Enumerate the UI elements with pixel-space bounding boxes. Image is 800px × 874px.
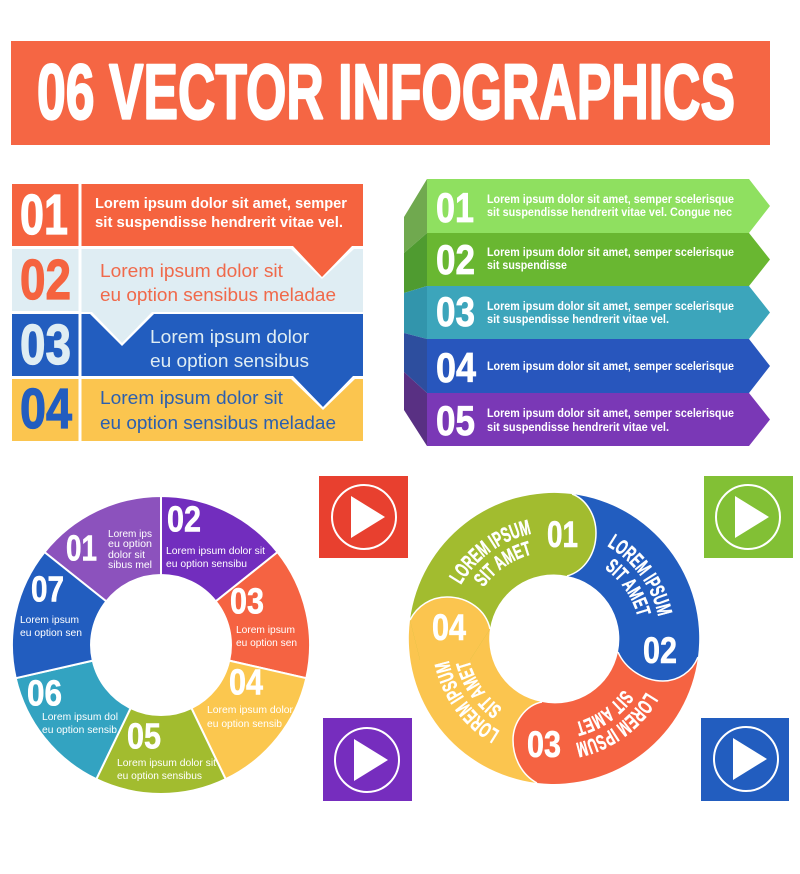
row 3	[404, 286, 770, 339]
row 5: Lorem ipsum dolor sit amet, semper scelerisque	[487, 408, 734, 420]
row 2: 02	[20, 248, 71, 312]
segment 06: 06	[27, 672, 62, 714]
icon: purple play button	[323, 718, 412, 801]
row 4: eu option sensibus meladae	[100, 413, 336, 433]
segment 01 label: LOREM IPSUM	[448, 520, 531, 584]
row 3: sit suspendisse hendrerit vitae vel.	[487, 314, 669, 326]
segment 04 label: 04	[432, 607, 466, 648]
segment 03: 03	[230, 580, 264, 622]
row 2	[12, 248, 363, 343]
row 4: 04	[436, 344, 477, 391]
segment 01: eu option	[108, 538, 152, 550]
segment 03	[216, 552, 310, 678]
segment 05: eu option sensibus	[117, 770, 202, 782]
segment 02: eu option sensibu	[166, 558, 247, 570]
row 5: sit suspendisse hendrerit vitae vel.	[487, 422, 669, 434]
segment 04: 04	[229, 662, 263, 702]
row 3: Lorem ipsum dolor sit amet, semper scelerisque	[487, 301, 734, 313]
segment 01 label: SIT AMET	[474, 540, 530, 586]
segment 01 label: 01	[547, 514, 578, 555]
segment 02 label: SIT AMET	[606, 559, 652, 614]
row 5	[404, 372, 770, 446]
row 3: 03	[20, 313, 71, 377]
segment 01: Lorem ips	[108, 528, 152, 540]
row 1	[12, 183, 363, 277]
row 3: 03	[436, 288, 475, 335]
row 1: 01	[436, 184, 474, 231]
segment 04	[191, 661, 306, 779]
row 4: 04	[20, 377, 72, 441]
icon: red play button	[319, 476, 408, 558]
segment 05: 05	[127, 716, 161, 756]
segment 01: dolor sit	[108, 549, 145, 561]
segment 01: 01	[66, 528, 97, 568]
segment 07	[12, 552, 106, 678]
segment 05	[96, 708, 226, 794]
row 2: Lorem ipsum dolor sit	[100, 261, 283, 281]
segment 04 label: LOREM IPSUM	[434, 661, 500, 744]
row 2: sit suspendisse	[487, 260, 567, 272]
row 5: 05	[436, 397, 475, 444]
icon: green play button	[704, 476, 793, 558]
row 4: Lorem ipsum dolor sit amet, semper scelerisque	[487, 361, 734, 373]
segment 04 label: SIT AMET	[456, 662, 501, 718]
row 4	[404, 333, 770, 393]
segment 03: eu option sen	[236, 637, 297, 649]
chart: seven segment donut	[12, 496, 310, 794]
segment 03: Lorem ipsum	[236, 624, 295, 636]
row 2: Lorem ipsum dolor sit amet, semper scelerisque	[487, 247, 734, 259]
row 1	[404, 179, 770, 253]
segment 04: Lorem ipsum dolor	[207, 704, 293, 716]
segment 03 label: SIT AMET	[578, 691, 633, 736]
segment 03 label	[527, 691, 658, 765]
segment 03 label: LOREM IPSUM	[576, 692, 658, 758]
segment 01: sibus mel	[108, 559, 152, 571]
row 2	[404, 233, 770, 293]
segment 07: Lorem ipsum	[20, 614, 79, 626]
segment 01 label	[448, 514, 578, 586]
segment 02 label: 02	[643, 630, 677, 671]
segment 05: Lorem ipsum dolor sit	[117, 757, 216, 769]
row 1: sit suspendisse hendrerit vitae vel.	[95, 215, 343, 231]
segment 06	[16, 661, 131, 779]
segment 04: eu option sensib	[207, 718, 282, 730]
row 1: sit suspendisse hendrerit vitae vel. Congue nec	[487, 207, 733, 219]
panel: stacked ribbon list	[12, 183, 363, 441]
segment 07: eu option sen	[20, 627, 82, 639]
row 2: 02	[436, 236, 475, 283]
segment 07: 07	[31, 568, 64, 610]
chart: four segment swirl ring	[408, 492, 700, 784]
row 3: eu option sensibus	[150, 351, 309, 371]
row 3: Lorem ipsum dolor	[150, 327, 309, 347]
segment 02 label: LOREM IPSUM	[608, 534, 672, 616]
row 2: eu option sensibus meladae	[100, 285, 336, 305]
segment 04 label	[432, 607, 501, 744]
icon: blue play button	[701, 718, 789, 801]
row 1: Lorem ipsum dolor sit amet, semper	[95, 196, 347, 212]
segment 06: Lorem ipsum dol	[42, 711, 118, 723]
row 3	[12, 313, 363, 407]
segment 03 label: 03	[527, 724, 561, 765]
row 1: 01	[20, 183, 68, 247]
segment 02 label	[606, 534, 677, 671]
segment 02	[161, 496, 278, 601]
segment 01	[44, 496, 161, 601]
segment 02: 02	[167, 498, 201, 540]
segment 02: Lorem ipsum dolor sit	[166, 545, 265, 557]
row 4	[12, 377, 363, 441]
segment 06: eu option sensib	[42, 724, 117, 736]
panel: 3D arrow list	[404, 179, 770, 446]
row 4: Lorem ipsum dolor sit	[100, 388, 283, 408]
row 1: Lorem ipsum dolor sit amet, semper scelerisque	[487, 194, 734, 206]
